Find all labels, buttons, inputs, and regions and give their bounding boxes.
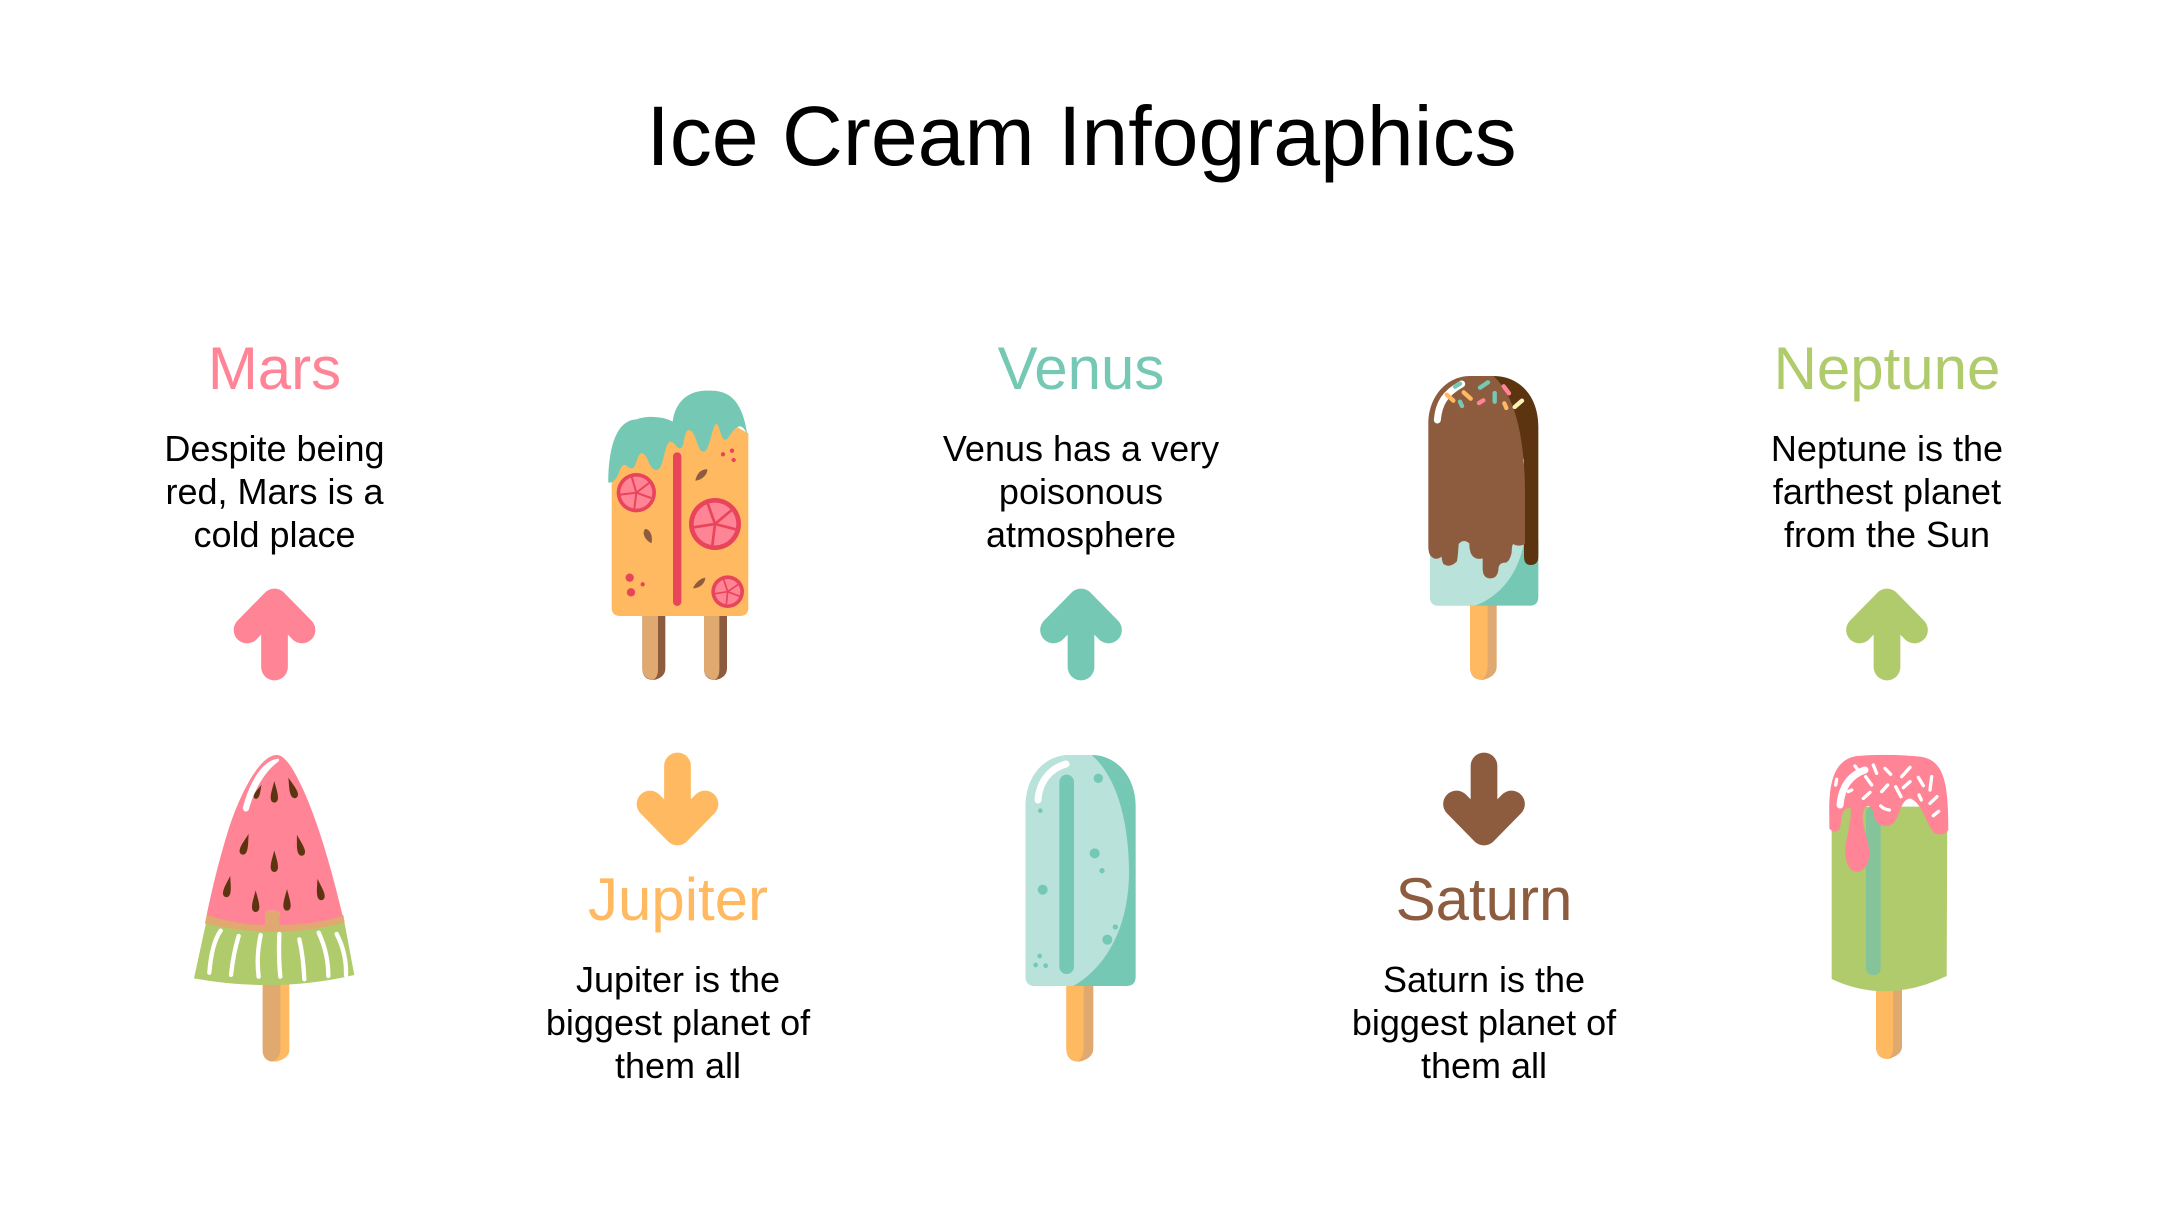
text: Neptune description: farthest planet (1773, 471, 2001, 512)
arrow: down brown (1456, 766, 1512, 832)
heading: Jupiter: Jupiter (588, 866, 768, 933)
text: Venus description: Venus has a very (943, 428, 1219, 469)
arrow: up green (1860, 602, 1914, 667)
icon: mint popsicle (1026, 755, 1136, 1062)
text: Venus description: atmosphere (986, 514, 1176, 555)
panel: Venus (943, 335, 1219, 1062)
text: Mars description: Despite being (164, 428, 385, 469)
icon: green popsicle with pink icing (1829, 755, 1948, 1059)
title: Ice Cream Infographics (646, 89, 1517, 183)
arrow: down orange (650, 766, 705, 832)
icon: chocolate popsicle (1428, 376, 1538, 680)
heading: Venus: Venus (998, 335, 1164, 402)
text: Venus description: poisonous (999, 471, 1163, 512)
text: Saturn description: biggest planet of (1352, 1002, 1617, 1043)
arrow: up pink (247, 602, 302, 667)
panel: Neptune (1771, 335, 2003, 1059)
heading: Mars: Mars (208, 335, 341, 402)
panel: Jupiter (546, 391, 811, 1086)
text: Neptune description: Neptune is the (1771, 428, 2003, 469)
heading: Neptune: Neptune (1774, 335, 2000, 402)
heading: Saturn: Saturn (1396, 866, 1572, 933)
text: Saturn description: them all (1421, 1045, 1547, 1086)
panel: Saturn (1352, 376, 1617, 1086)
panel: Mars (164, 335, 385, 1062)
text: Jupiter description: biggest planet of (546, 1002, 811, 1043)
arrow: up teal (1054, 602, 1108, 667)
text: Neptune description: from the Sun (1784, 514, 1990, 555)
text: Mars description: cold place (193, 514, 356, 555)
text: Saturn description: Saturn is the (1383, 959, 1585, 1000)
text: Mars description: red, Mars is a (165, 471, 385, 512)
text: Jupiter description: them all (615, 1045, 741, 1086)
text: Jupiter description: Jupiter is the (576, 959, 780, 1000)
icon: watermelon popsicle (194, 755, 354, 1062)
icon: citrus popsicle (608, 391, 748, 680)
